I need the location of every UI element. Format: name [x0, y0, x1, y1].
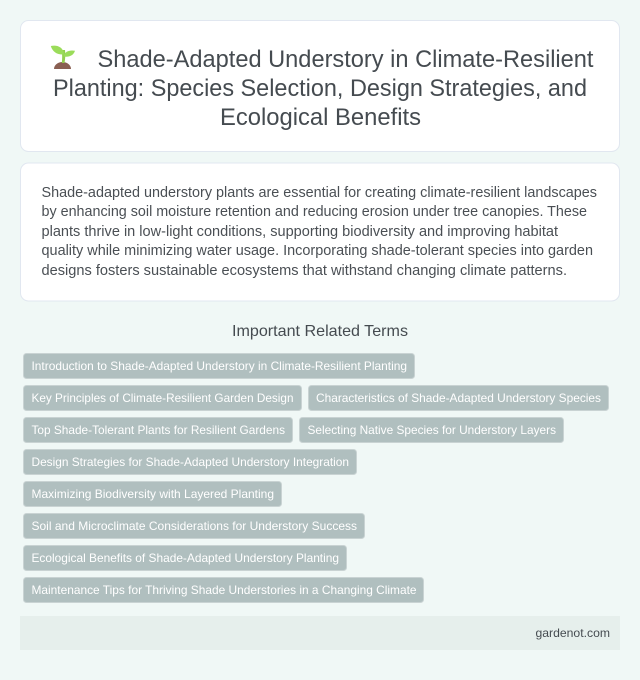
title text: Ecological Benefits	[220, 104, 421, 131]
tag	[24, 450, 356, 474]
icon: seedling	[51, 46, 75, 69]
tag: Introduction to Shade-Adapted Understory in Climate-Resilient Planting	[32, 359, 407, 373]
tag: Characteristics of Shade-Adapted Understory Species	[316, 391, 601, 405]
title text: Shade-Adapted Understory in Climate-Resilient	[98, 46, 594, 73]
heading: related terms: Important Related Terms	[232, 323, 408, 340]
title text	[53, 46, 594, 131]
summary text	[42, 185, 597, 279]
summary text: designs fosters sustainable ecosystems that withstand changing climate patterns.	[42, 263, 567, 279]
summary text: quality while minimizing water usage. Incorporating shade-tolerant species into garden	[42, 243, 593, 259]
tag	[308, 386, 608, 410]
tag: Top Shade-Tolerant Plants for Resilient Gardens	[32, 423, 285, 437]
tag	[24, 482, 282, 506]
summary text: Shade-adapted understory plants are essential for creating climate-resilient landscapes	[42, 185, 597, 201]
panel: title	[20, 20, 620, 152]
tag list	[24, 354, 608, 602]
tag	[300, 418, 564, 442]
footer	[20, 616, 620, 650]
summary text: by enhancing soil moisture retention and reducing erosion under tree canopies. These	[42, 204, 587, 220]
tag	[24, 354, 414, 378]
tag: Design Strategies for Shade-Adapted Understory Integration	[32, 455, 349, 469]
title text: Planting: Species Selection, Design Strategies, and	[53, 75, 587, 102]
panel: summary	[20, 163, 620, 301]
tag	[24, 418, 292, 442]
tag: Key Principles of Climate-Resilient Garden Design	[32, 391, 294, 405]
summary text: plants thrive in low-light conditions, supporting biodiversity and improving habitat	[42, 224, 558, 240]
tag: Maximizing Biodiversity with Layered Planting	[32, 487, 274, 501]
tag	[24, 578, 424, 602]
tag	[24, 514, 364, 538]
footer source text: gardenot.com	[536, 626, 610, 640]
tag: Maintenance Tips for Thriving Shade Understories in a Changing Climate	[32, 583, 417, 597]
tag: Ecological Benefits of Shade-Adapted Understory Planting	[32, 551, 339, 565]
tag: Soil and Microclimate Considerations for Understory Success	[32, 519, 357, 533]
tag	[24, 386, 302, 410]
tag	[24, 546, 346, 570]
tag: Selecting Native Species for Understory Layers	[308, 423, 556, 437]
